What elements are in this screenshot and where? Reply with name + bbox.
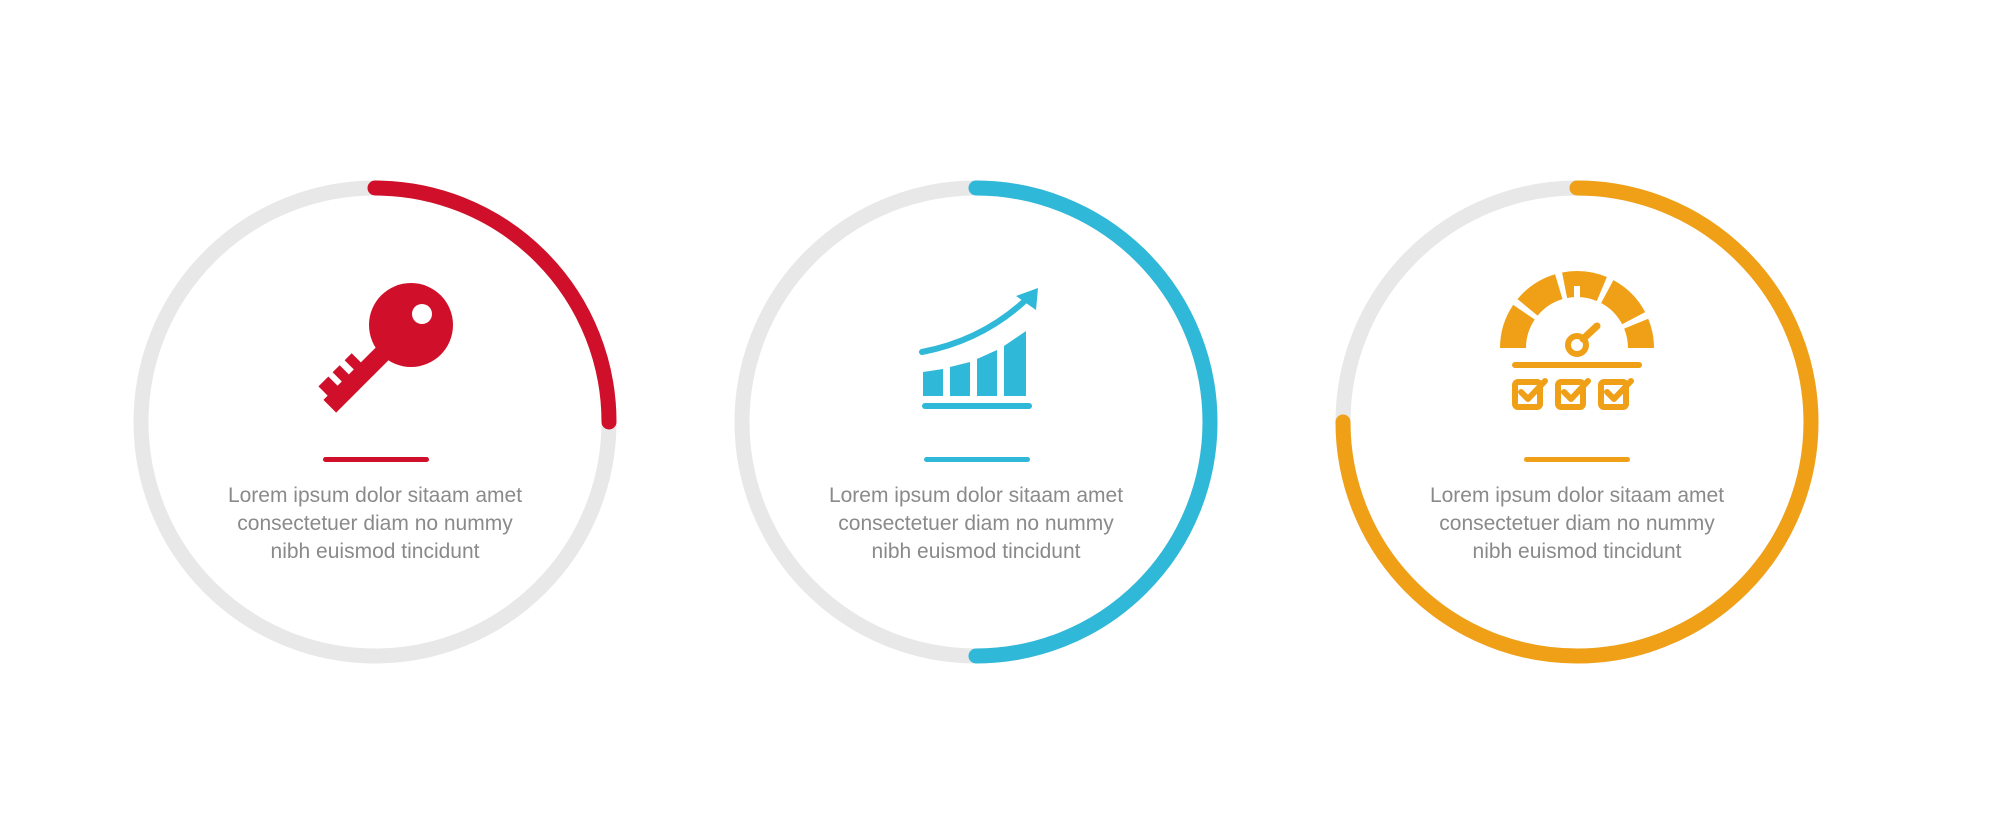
underline 2 (924, 457, 1030, 462)
text 2: nibh euismod tincidunt (872, 540, 1081, 563)
ring 3 (1343, 188, 1811, 656)
icon: key (314, 283, 453, 413)
text 1: nibh euismod tincidunt (271, 540, 480, 563)
ring 1 (141, 188, 609, 656)
text 1: consectetuer diam no nummy (237, 512, 513, 535)
text 2: Lorem ipsum dolor sitaam amet (829, 484, 1123, 507)
text 3: consectetuer diam no nummy (1439, 512, 1715, 535)
text 1: Lorem ipsum dolor sitaam amet (228, 484, 522, 507)
underline 3 (1524, 457, 1630, 462)
panel: step 2 blue (742, 188, 1210, 656)
icon: gauge checklist (1512, 284, 1642, 407)
text 1 (228, 484, 522, 563)
underline 1 (323, 457, 429, 462)
text 3: Lorem ipsum dolor sitaam amet (1430, 484, 1724, 507)
icon: growth chart (922, 288, 1038, 409)
panel: step 1 red (141, 188, 609, 656)
panel: step 3 orange (1343, 188, 1811, 656)
ring 2 (742, 188, 1210, 656)
text 2 (829, 484, 1123, 563)
text 3: nibh euismod tincidunt (1473, 540, 1682, 563)
text 3 (1430, 484, 1724, 563)
text 2: consectetuer diam no nummy (838, 512, 1114, 535)
